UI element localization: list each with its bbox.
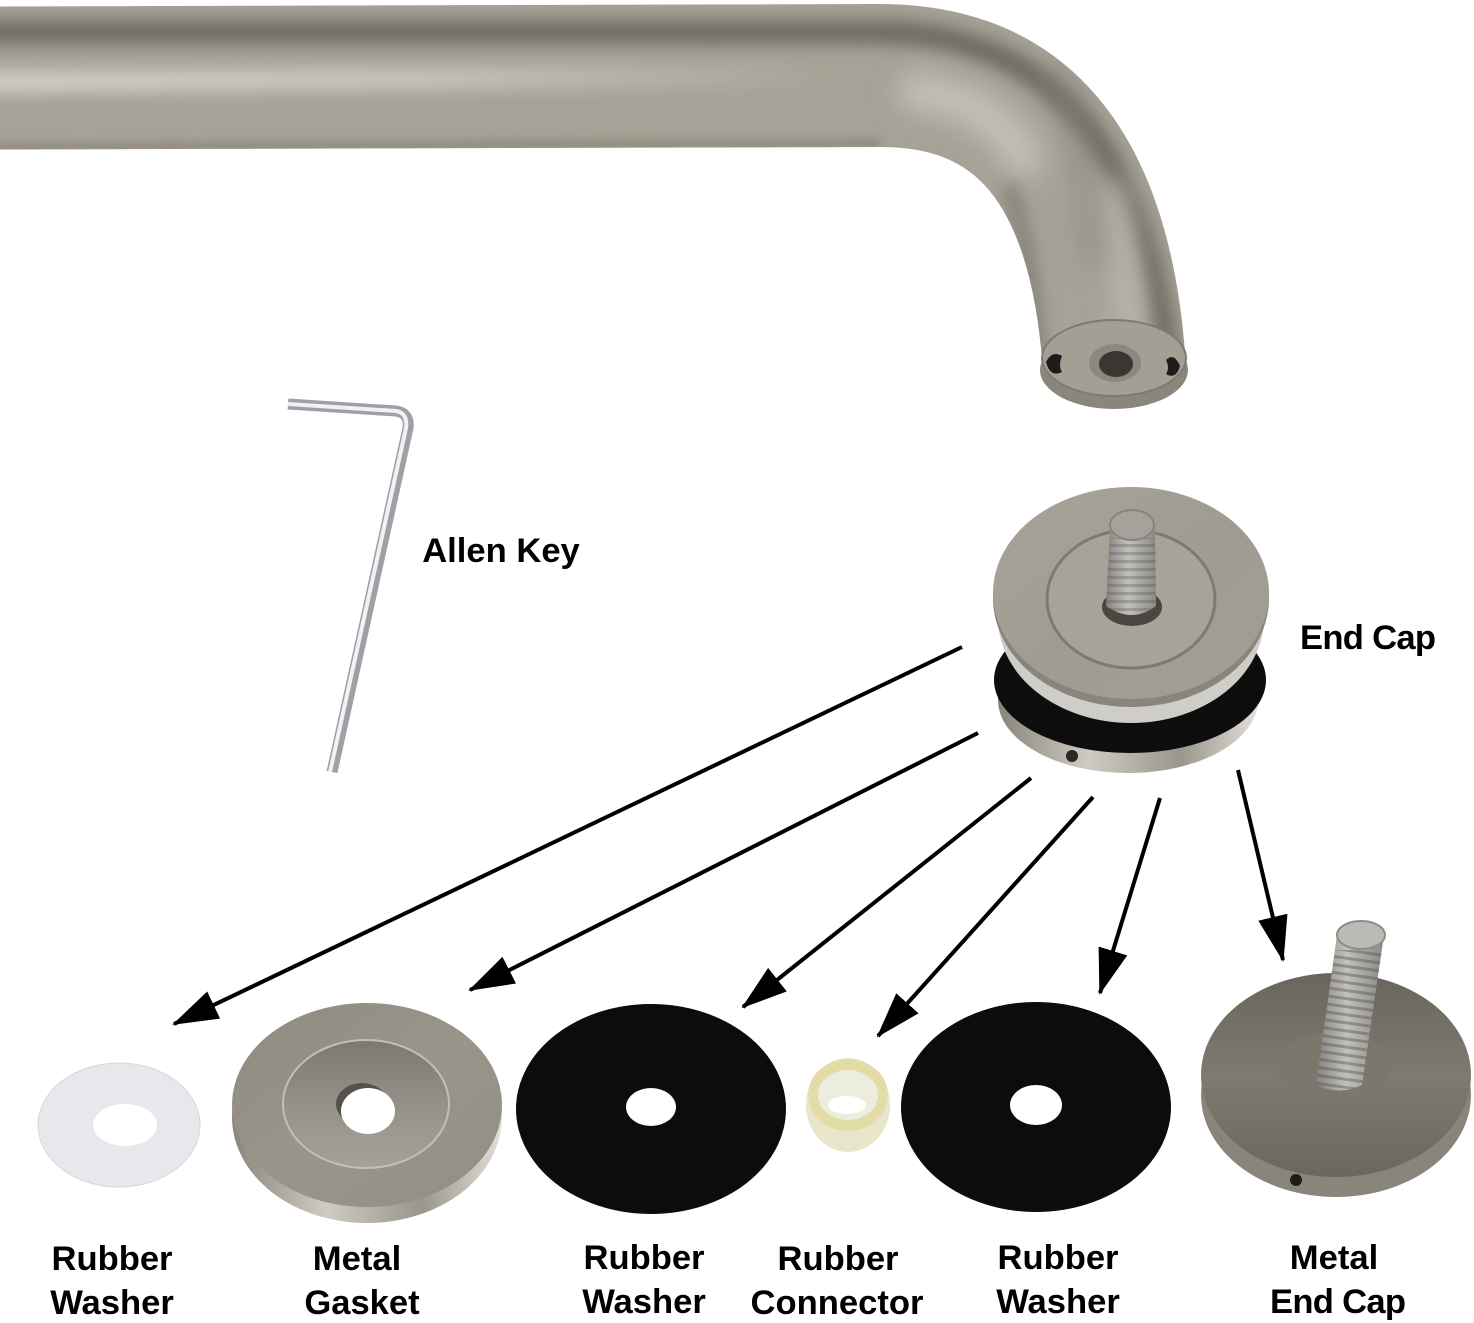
labels: parts: Rubber xyxy=(583,1239,705,1277)
threaded bolt xyxy=(1316,921,1385,1090)
handle bar xyxy=(0,32,1188,409)
assembled end cap xyxy=(993,487,1269,773)
labels: parts: Gasket xyxy=(304,1284,420,1322)
part: black rubber washer 2 xyxy=(901,1002,1171,1212)
arrows xyxy=(174,647,1283,1036)
part: clear rubber washer xyxy=(38,1063,200,1187)
labels: parts: Washer xyxy=(996,1283,1120,1321)
icon: allen key xyxy=(288,404,408,772)
label: end cap: End Cap xyxy=(1300,619,1436,657)
labels: parts: Rubber xyxy=(777,1240,899,1278)
label: allen key: Allen Key xyxy=(422,532,581,570)
labels: parts: Connector xyxy=(751,1284,923,1322)
labels: parts: Washer xyxy=(582,1283,706,1321)
labels: parts: Rubber xyxy=(997,1239,1119,1277)
labels: parts: Metal xyxy=(313,1240,401,1278)
labels: parts: Metal xyxy=(1290,1239,1378,1277)
labels: parts: Washer xyxy=(50,1284,174,1322)
threaded bolt xyxy=(1106,510,1156,615)
handle end face xyxy=(1040,320,1188,409)
labels: parts: End Cap xyxy=(1270,1283,1406,1321)
part: metal gasket xyxy=(232,1003,502,1223)
part: metal end cap xyxy=(1201,921,1471,1197)
part: black rubber washer xyxy=(516,1004,786,1214)
part: rubber connector xyxy=(806,1058,890,1152)
labels: parts xyxy=(50,1239,1406,1322)
labels: parts: Rubber xyxy=(51,1240,173,1278)
